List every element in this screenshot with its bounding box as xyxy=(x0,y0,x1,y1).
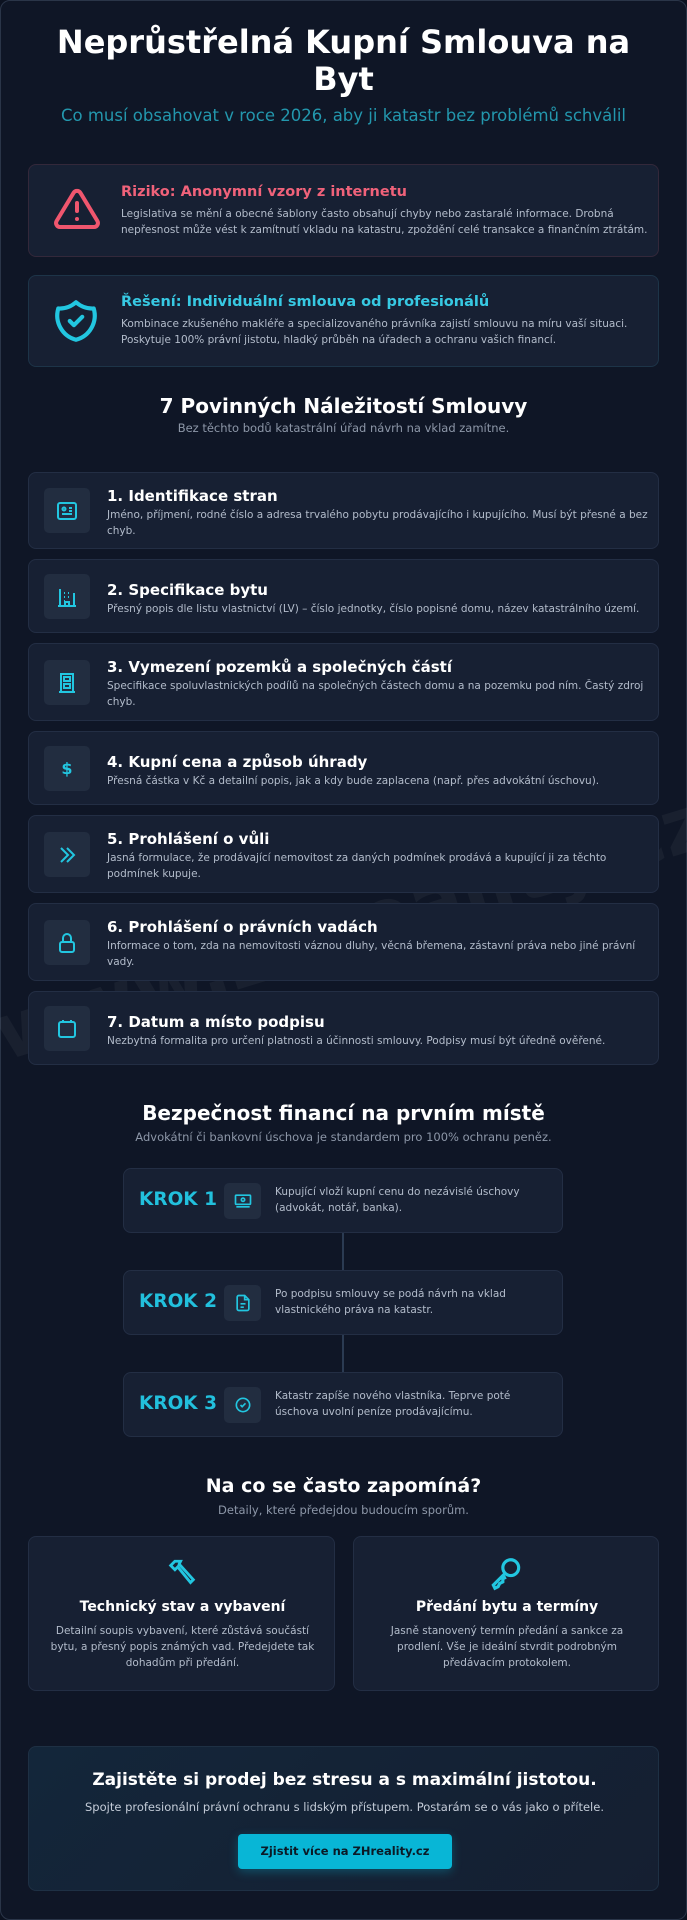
step 2: KROK 2 xyxy=(139,1291,217,1312)
item 7 text: 7. Datum a místo podpisu xyxy=(107,1013,325,1031)
icon: key xyxy=(491,1558,520,1590)
step 1: KROK 1 xyxy=(139,1189,217,1210)
item 4 xyxy=(28,731,659,805)
item 5 text xyxy=(106,830,606,880)
icon: chevrons xyxy=(44,832,90,877)
item 1 text xyxy=(106,487,648,537)
item 3 text: 3. Vymezení pozemků a společných částí xyxy=(107,658,452,676)
icon: building xyxy=(44,574,90,619)
subtitle: Co musí obsahovat v roce 2026, aby ji katastr bez problémů schválil xyxy=(61,106,626,125)
item 4 text xyxy=(107,753,599,787)
item 2 text: Přesný popis dle listu vlastnictví (LV) – číslo jednotky, číslo popisné domu, název katastrálního území. xyxy=(107,603,639,615)
item 2 xyxy=(28,559,659,633)
title: Neprůstřelná Kupní Smlouva na xyxy=(57,23,630,61)
button: Zjistit více na ZHreality.cz xyxy=(261,1844,429,1858)
icon: money xyxy=(224,1183,261,1219)
icon: document xyxy=(224,1285,261,1321)
item 6 text xyxy=(107,918,636,968)
card: technical xyxy=(28,1536,335,1691)
button xyxy=(238,1834,452,1869)
item 1 text: Jméno, příjmení, rodné číslo a adresa trvalého pobytu prodávajícího i kupujícího. Musí být přesné a bez chyb. xyxy=(107,509,648,537)
item 2 text xyxy=(107,581,639,615)
card: technical: Detailní soupis vybavení, které zůstává součástí bytu, a přesný popis známých vad. Předejdete tak dohadům při předání. xyxy=(51,1625,314,1669)
heading: forgotten: Na co se často zapomíná? xyxy=(206,1475,481,1497)
item 2 text: 2. Specifikace bytu xyxy=(107,581,268,599)
item 1 text: 1. Identifikace stran xyxy=(107,487,278,505)
heading: finance: Bezpečnost financí na prvním místě xyxy=(142,1101,545,1125)
title: Byt xyxy=(313,60,374,98)
item 3 text xyxy=(107,658,643,708)
icon: door xyxy=(44,660,90,705)
item 6 text: 6. Prohlášení o právních vadách xyxy=(107,918,378,936)
step 3 xyxy=(123,1372,563,1437)
icon: dollar: $ xyxy=(61,759,73,778)
CTA panel: Spojte profesionální právní ochranu s lidským přístupem. Postarám se o vás jako o přítele. xyxy=(85,1800,604,1814)
heading: 7 items: 7 Povinných Náležitostí Smlouvy xyxy=(160,394,527,418)
item 1 xyxy=(28,472,659,549)
step 1 xyxy=(123,1168,563,1233)
item 7 text: Nezbytná formalita pro určení platnosti a účinnosti smlouvy. Podpisy musí být úředně ověřené. xyxy=(107,1035,605,1047)
card: handover: Jasně stanovený termín předání a sankce za prodlení. Vše je ideální stvrdit podrobným předávacím protokolem. xyxy=(391,1625,623,1669)
panel: solution xyxy=(28,275,659,367)
title xyxy=(57,23,630,98)
item 4 text: 4. Kupní cena a způsob úhrady xyxy=(107,753,367,771)
connector lines xyxy=(342,1233,344,1372)
item 5 xyxy=(28,815,659,893)
icon: shield xyxy=(55,300,97,342)
item 6 text: Informace o tom, zda na nemovitosti váznou dluhy, věcná břemena, zástavní práva nebo jiné právní vady. xyxy=(107,940,635,968)
item 5 text: 5. Prohlášení o vůli xyxy=(107,830,269,848)
icon: warning xyxy=(54,188,100,229)
icon: wrench xyxy=(168,1560,196,1585)
step 3: KROK 3 xyxy=(139,1393,217,1414)
card: handover: Předání bytu a termíny xyxy=(416,1599,598,1615)
icon: badge check xyxy=(224,1387,261,1423)
icon: calendar xyxy=(44,1006,90,1051)
item 4 text: Přesná částka v Kč a detailní popis, jak a kdy bude zaplacena (např. přes advokátní úschovu). xyxy=(107,775,599,787)
CTA panel: Zajistěte si prodej bez stresu a s maximální jistotou. xyxy=(92,1770,597,1790)
subheading forgotten: Detaily, které předejdou budoucím sporům. xyxy=(218,1503,469,1517)
step 1: Kupující vloží kupní cenu do nezávislé úschovy (advokát, notář, banka). xyxy=(275,1186,520,1214)
card: handover xyxy=(353,1536,659,1691)
subheading finance: Advokátní či bankovní úschova je standardem pro 100% ochranu peněz. xyxy=(135,1130,552,1144)
step 2 xyxy=(123,1270,563,1335)
solution text: Kombinace zkušeného makléře a specializovaného právníka zajistí smlouvu na míru vaší situaci. Poskytuje 100% právní jistotu, hladký průběh na úřadech a ochranu vašich financí. xyxy=(121,318,627,346)
icon: lock xyxy=(44,920,90,965)
item 3 text: Specifikace spoluvlastnických podílů na společných částech domu a na pozemku pod ním. Častý zdroj chyb. xyxy=(107,680,643,708)
item 7 xyxy=(28,991,659,1065)
risk text: Legislativa se mění a obecné šablony často obsahují chyby nebo zastaralé informace. Drobná nepřesnost může vést k zamítnutí vkladu na katastru, zpoždění celé transakce a finančním ztrátám. xyxy=(121,208,647,236)
panel: risk xyxy=(28,164,659,257)
step 3: Katastr zapíše nového vlastníka. Teprve poté úschova uvolní peníze prodávajícímu. xyxy=(275,1390,510,1418)
card: technical: Technický stav a vybavení xyxy=(80,1599,285,1615)
risk heading: Riziko: Anonymní vzory z internetu xyxy=(121,184,407,200)
subheading: Bez těchto bodů katastrální úřad návrh na vklad zamítne. xyxy=(178,421,509,435)
step 2: Po podpisu smlouvy se podá návrh na vklad vlastnického práva na katastr. xyxy=(275,1288,506,1316)
item 7 text xyxy=(107,1013,605,1047)
icon: id card xyxy=(44,488,90,533)
item 6 xyxy=(28,903,659,981)
icon: dollar xyxy=(44,746,90,791)
CTA panel xyxy=(28,1746,659,1891)
item 3 xyxy=(28,643,659,721)
solution heading: Řešení: Individuální smlouva od profesionálů xyxy=(121,294,489,310)
item 5 text: Jasná formulace, že prodávající nemovitost za daných podmínek prodává a kupující ji za těchto podmínek kupuje. xyxy=(107,852,606,880)
